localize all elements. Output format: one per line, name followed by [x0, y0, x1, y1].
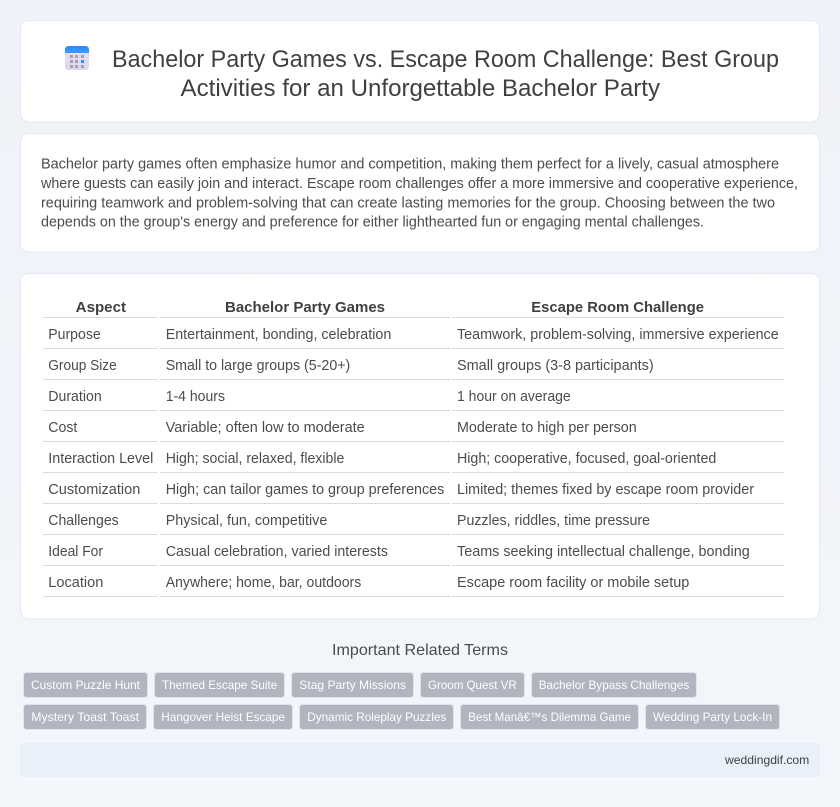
- row: customization: Limited; themes fixed by escape room provider: [457, 482, 754, 498]
- row: purpose: Entertainment, bonding, celebration: [166, 327, 391, 343]
- table header row: Bachelor Party Games: [225, 299, 385, 316]
- tag: themed escape suite: Themed Escape Suite: [162, 678, 278, 692]
- intro paragraph: Bachelor party games often emphasize humor and competition, making them perfect for a lively, casual atmosphere: [41, 156, 779, 172]
- row: duration: 1-4 hours: [166, 389, 225, 405]
- tag: groom quest vr: [420, 672, 524, 698]
- row: challenges: Challenges: [48, 513, 119, 529]
- table header row: Escape Room Challenge: [531, 299, 704, 316]
- row: location: [48, 575, 689, 591]
- intro paragraph: where guests can easily join and interact. Escape room challenges offer a more immersive and cooperative experience,: [40, 176, 798, 192]
- heading: important related terms: Important Related Terms: [332, 642, 508, 659]
- tag: custom puzzle hunt: [24, 672, 148, 698]
- intro paragraph: depends on the group's energy and preference for either lighthearted fun or engaging mental challenges.: [41, 214, 704, 230]
- footer bar: [20, 743, 820, 777]
- row: customization: High; can tailor games to group preferences: [166, 482, 444, 498]
- row: purpose: [48, 327, 779, 343]
- panel: introduction: [20, 134, 820, 252]
- row: customization: Customization: [48, 482, 140, 498]
- title: Activities for an Unforgettable Bachelor Party: [180, 75, 660, 102]
- row: cost: [48, 420, 637, 436]
- row: ideal for: Ideal For: [48, 544, 103, 560]
- row: ideal for: Casual celebration, varied interests: [166, 544, 388, 560]
- intro paragraph: [40, 156, 798, 230]
- tag: best man's dilemma game: Best Manâ€™s Dilemma Game: [468, 710, 631, 724]
- row: interaction level: High; cooperative, focused, goal-oriented: [457, 451, 716, 467]
- row: ideal for: [48, 544, 750, 560]
- row: customization: [48, 482, 754, 498]
- row: group size: Group Size: [48, 358, 117, 374]
- icon: calendar: [65, 46, 89, 70]
- row: duration: Duration: [48, 389, 102, 405]
- row: purpose: Purpose: [48, 327, 101, 343]
- tag: stag party missions: Stag Party Missions: [299, 678, 406, 692]
- related term tags: [24, 672, 780, 730]
- row: location: Anywhere; home, bar, outdoors: [166, 575, 361, 591]
- row: duration: 1 hour on average: [457, 389, 571, 405]
- title: Bachelor Party Games vs. Escape Room Challenge: Best Group: [112, 46, 779, 73]
- tag: custom puzzle hunt: Custom Puzzle Hunt: [31, 678, 141, 692]
- row: group size: Small to large groups (5-20+): [166, 358, 350, 374]
- title: [112, 46, 779, 102]
- row: ideal for: Teams seeking intellectual challenge, bonding: [457, 544, 750, 560]
- intro paragraph: requiring teamwork and problem-solving that can create lasting memories for the group. Choosing between the two: [41, 196, 775, 212]
- table header row: Aspect: [76, 299, 126, 316]
- tag: groom quest vr: Groom Quest VR: [428, 678, 517, 692]
- row: interaction level: Interaction Level: [48, 451, 153, 467]
- tag: wedding party lock-in: Wedding Party Lock-In: [653, 710, 772, 724]
- panel: comparison table: [20, 274, 820, 619]
- row: location: Location: [48, 575, 103, 591]
- tag: wedding party lock-in: [646, 704, 780, 730]
- row: cost: Moderate to high per person: [457, 420, 637, 436]
- tag: bachelor bypass challenges: Bachelor Bypass Challenges: [539, 678, 689, 692]
- panel: title header: [20, 20, 820, 122]
- footer bar: weddingdif.com: [724, 753, 809, 767]
- table header row: [76, 299, 704, 316]
- row: interaction level: [48, 451, 716, 467]
- row: cost: Variable; often low to moderate: [166, 420, 365, 436]
- tag: bachelor bypass challenges: [532, 672, 696, 698]
- tag: dynamic roleplay puzzles: Dynamic Roleplay Puzzles: [307, 710, 446, 724]
- row: duration: [48, 389, 571, 405]
- tag: hangover heist escape: [154, 704, 292, 730]
- row: challenges: [48, 513, 650, 529]
- tag: dynamic roleplay puzzles: [300, 704, 454, 730]
- row: interaction level: High; social, relaxed, flexible: [166, 451, 344, 467]
- tag: best man's dilemma game: [460, 704, 638, 730]
- row: group size: Small groups (3-8 participants): [457, 358, 654, 374]
- row: challenges: Physical, fun, competitive: [166, 513, 327, 529]
- row: group size: [48, 358, 654, 374]
- row: location: Escape room facility or mobile setup: [457, 575, 689, 591]
- tag: hangover heist escape: Hangover Heist Escape: [161, 710, 285, 724]
- row: purpose: Teamwork, problem-solving, immersive experience: [457, 327, 779, 343]
- row: challenges: Puzzles, riddles, time pressure: [457, 513, 650, 529]
- tag: stag party missions: [292, 672, 414, 698]
- tag: mystery toast toast: Mystery Toast Toast: [31, 710, 140, 724]
- row: cost: Cost: [48, 420, 77, 436]
- tag: mystery toast toast: [24, 704, 146, 730]
- tag: themed escape suite: [154, 672, 284, 698]
